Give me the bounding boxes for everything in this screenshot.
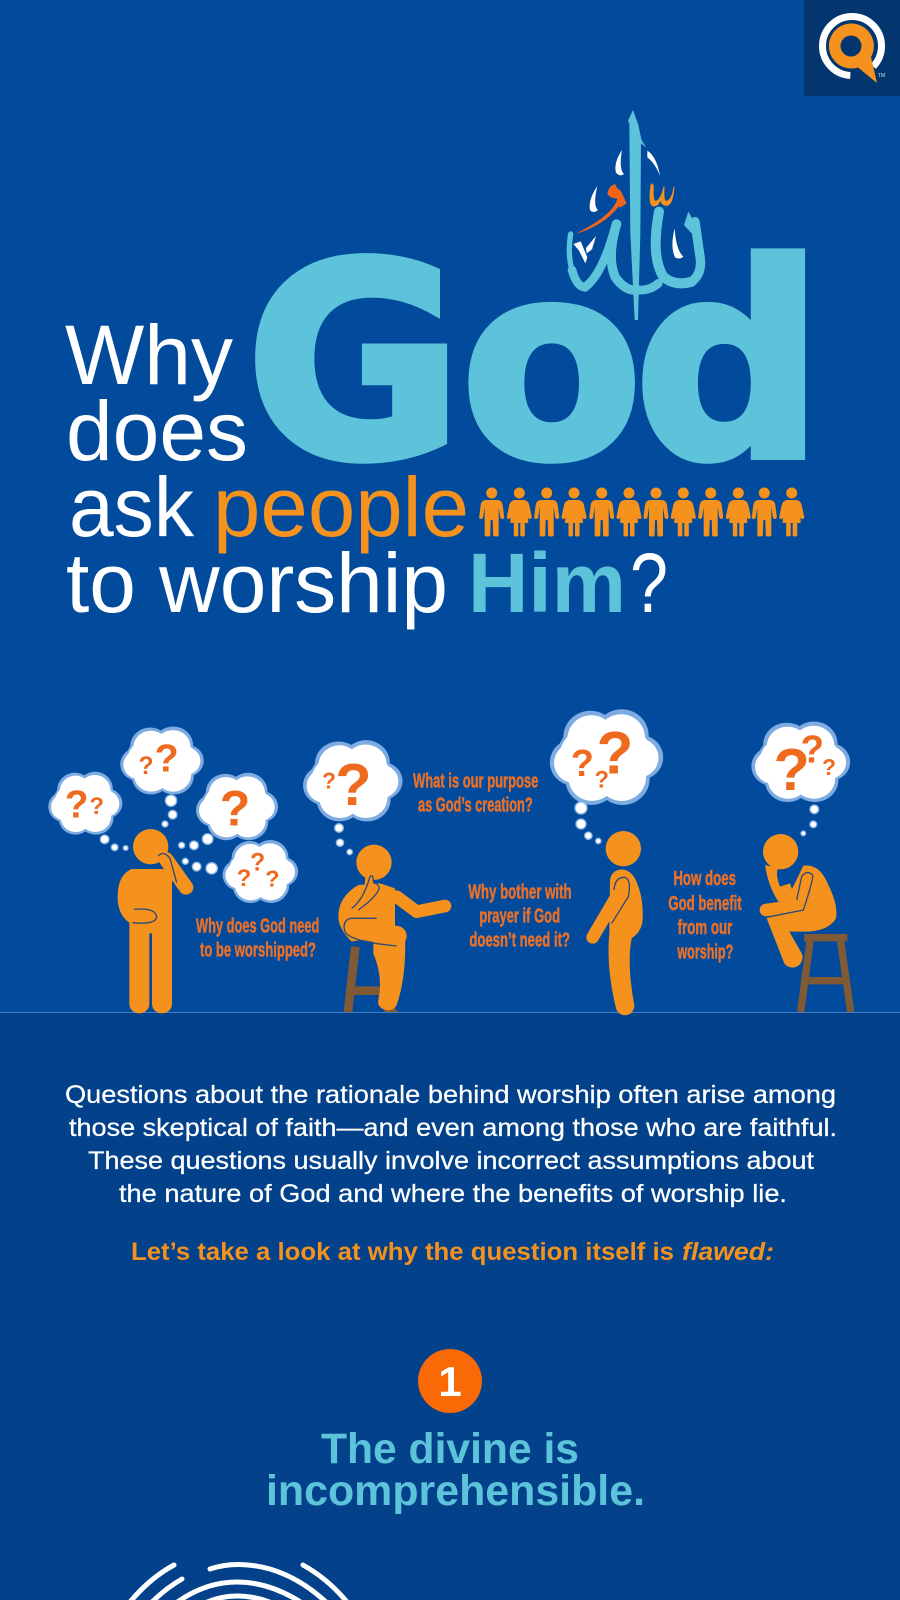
background: upper panel <box>0 0 900 1012</box>
icon: Allah calligraphy <box>569 110 701 320</box>
figure: standing, head bowed <box>593 831 643 1015</box>
illustration: left half <box>48 726 445 1013</box>
heading: the divine is incomprehensible: incomprehensible. <box>266 1467 645 1515</box>
calligraphy accent: orange letter <box>575 184 627 234</box>
thought cloud 6: ? <box>597 719 633 786</box>
thought cloud 3: ? <box>220 781 250 837</box>
label: what is our purpose: as God’s creation? <box>418 795 533 817</box>
icon row: twelve people <box>479 488 804 536</box>
label: what is our purpose <box>413 771 538 817</box>
label: why does God need to be worshipped: to be worshipped? <box>200 940 316 962</box>
title word: people: people <box>213 460 469 554</box>
calligraphy accent: gold shadda <box>650 184 674 206</box>
label: why bother with prayer: prayer if God <box>479 906 560 928</box>
intro paragraph: These questions usually involve incorrect assumptions about <box>88 1147 814 1175</box>
thought cloud 5 <box>303 740 403 821</box>
background: lower panel <box>0 1012 900 1600</box>
intro paragraph: those skeptical of faith—and even among those who are faithful. <box>69 1114 837 1142</box>
thought cloud 3 <box>196 773 278 840</box>
title word: Why: Why <box>65 308 233 402</box>
thought bubbles <box>100 795 352 874</box>
figure: seated, chin on hand <box>763 834 851 1012</box>
figure: standing thinker <box>118 829 186 1013</box>
thought cloud 2: ? <box>138 753 154 780</box>
number badge 1: 1 <box>438 1358 462 1405</box>
label: why bother with prayer: doesn’t need it? <box>469 930 570 952</box>
thought cloud 4: ? <box>265 866 279 892</box>
thought cloud 2: ? <box>155 736 179 780</box>
heading: the divine is incomprehensible <box>266 1425 645 1515</box>
lead-in line: flawed: <box>682 1238 774 1266</box>
label: how does God benefit: worship? <box>677 941 733 963</box>
thought cloud 4: ? <box>237 865 251 892</box>
thought bubbles <box>575 802 819 844</box>
title word: God: God <box>246 207 823 519</box>
label: how does God benefit <box>668 868 742 963</box>
label: how does God benefit: from our <box>678 917 732 939</box>
illustration: right half <box>413 709 851 1015</box>
thought cloud 7 <box>751 721 850 803</box>
thought cloud 1 <box>48 772 122 835</box>
label: why does God need to be worshipped <box>196 916 319 962</box>
thought cloud 1: ? <box>89 793 104 820</box>
logo: TM <box>878 73 885 79</box>
intro paragraph <box>65 1081 837 1208</box>
title word: Him: Him <box>468 536 626 630</box>
icon: concentric rings, cropped <box>130 1564 347 1600</box>
title <box>65 207 823 630</box>
thought cloud 7: ? <box>801 729 824 772</box>
thought cloud 2 <box>120 726 204 795</box>
label: what is our purpose: What is our purpose <box>413 771 538 793</box>
label: how does God benefit: How does <box>673 868 736 890</box>
label: how does God benefit: God benefit <box>668 893 742 915</box>
label: why does God need to be worshipped: Why does God need <box>196 916 319 938</box>
thought cloud 1: ? <box>65 784 88 827</box>
title words: to worship: to worship <box>66 536 448 630</box>
logo <box>804 0 900 96</box>
lead-in line: Let’s take a look at why the question itself is <box>131 1238 674 1266</box>
heading: the divine is incomprehensible: The divine is <box>321 1425 579 1473</box>
thought cloud 5: ? <box>322 767 336 793</box>
thought cloud 6: ? <box>594 767 609 793</box>
intro paragraph: Questions about the rationale behind worship often arise among <box>65 1081 836 1109</box>
title word: ask: ask <box>69 460 195 554</box>
thought cloud 4: ? <box>250 850 265 877</box>
title word: does: does <box>66 384 248 478</box>
number badge 1 <box>418 1349 482 1413</box>
thought cloud 7: ? <box>774 736 810 803</box>
figure: seated on stool, gesturing <box>338 845 445 1012</box>
calligraphy accents: white marks <box>573 150 683 263</box>
thought cloud 5: ? <box>335 751 371 818</box>
label: why bother with prayer: Why bother with <box>468 881 572 903</box>
title question mark: ? <box>630 536 668 630</box>
thought cloud 7: ? <box>822 754 836 780</box>
intro paragraph: the nature of God and where the benefits of worship lie. <box>119 1180 787 1208</box>
label: why bother with prayer <box>468 881 572 952</box>
thought cloud 6: ? <box>571 742 594 784</box>
thought cloud 4 <box>223 840 298 903</box>
thought cloud 6 <box>550 709 663 805</box>
